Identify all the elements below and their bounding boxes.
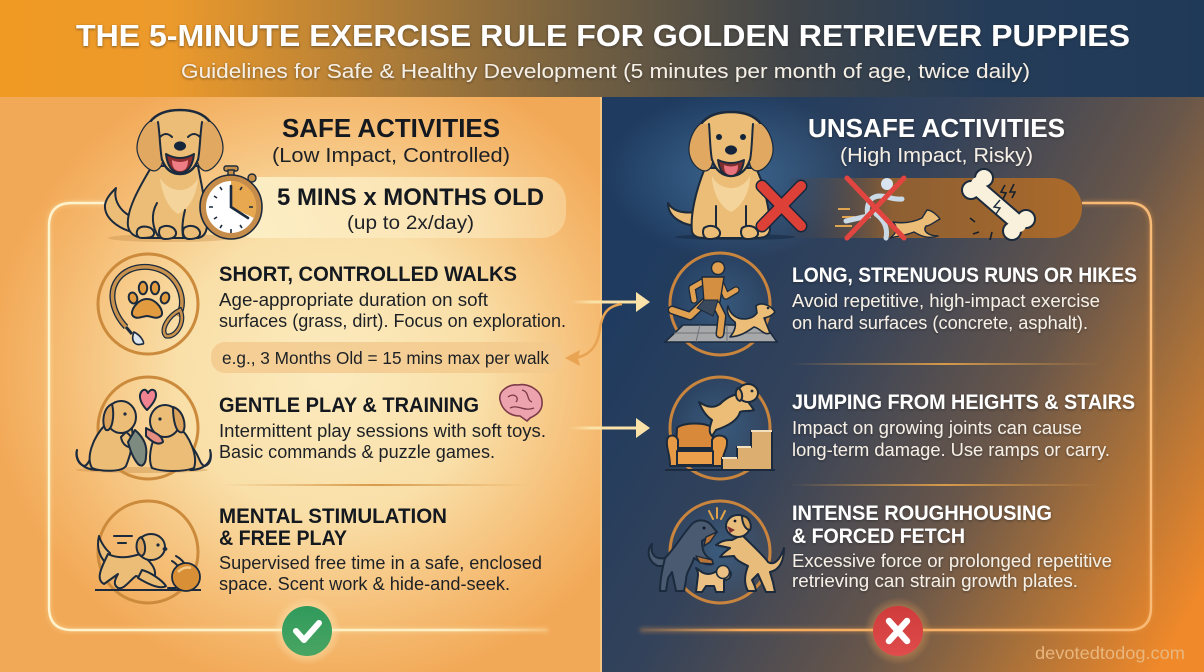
body: roughhousing xyxy=(792,551,1112,591)
item: jumping xyxy=(665,377,1135,479)
body: long runs: on hard surfaces (concrete, asphalt). xyxy=(792,313,1088,333)
icon: runner with dog on pavement xyxy=(665,253,777,355)
heading: short walks: SHORT, CONTROLLED WALKS xyxy=(219,263,517,286)
body: short walks xyxy=(219,290,566,331)
icon: red cross xyxy=(762,186,801,226)
icon: green check badge xyxy=(273,597,341,665)
watermark: devotedtodog.com xyxy=(1035,643,1185,663)
item: roughhousing xyxy=(649,501,1112,603)
subheading: low impact: (Low Impact, Controlled) xyxy=(272,145,510,167)
body: long runs: Avoid repetitive, high-impact exercise xyxy=(792,291,1100,311)
body: jumping xyxy=(792,418,1110,460)
icon: alert puppy xyxy=(668,112,795,240)
frame: safe panel outline xyxy=(49,203,548,630)
panel: safe activities xyxy=(0,97,601,672)
heading: roughhousing: INTENSE ROUGHHOUSING xyxy=(792,502,1052,525)
icon: red cross badge xyxy=(864,597,932,665)
arrow: walks to runs xyxy=(570,292,650,312)
header banner xyxy=(0,0,1204,97)
body: roughhousing: retrieving can strain growth plates. xyxy=(792,571,1078,591)
icon: brain xyxy=(500,385,542,421)
heading: safe activities: SAFE ACTIVITIES xyxy=(282,113,500,143)
body: gentle play: Basic commands & puzzle games. xyxy=(219,442,495,462)
subtitle: Guidelines for Safe & Healthy Development (5 minutes per month of age, twice daily) xyxy=(181,61,1030,83)
icon: happy puppy xyxy=(105,110,232,242)
heading: jumping: JUMPING FROM HEIGHTS & STAIRS xyxy=(792,391,1135,414)
formula pill xyxy=(230,113,566,238)
icon: crossed out running xyxy=(835,178,940,238)
heading: gentle play: GENTLE PLAY & TRAINING xyxy=(219,394,479,417)
body: mental stimulation: space. Scent work & hide-and-seek. xyxy=(219,574,510,594)
body: jumping: Impact on growing joints can cause xyxy=(792,418,1082,438)
item: long strenuous runs xyxy=(665,253,1137,355)
heading: mental stimulation xyxy=(219,505,447,550)
body: roughhousing: Excessive force or prolonged repetitive xyxy=(792,551,1112,571)
formula text: 5 MINS x MONTHS OLD xyxy=(277,184,544,211)
icon: dogs roughhousing xyxy=(649,501,784,603)
arrow: play to jumping xyxy=(568,418,650,438)
item: gentle play and training xyxy=(76,377,546,479)
heading: mental stimulation: MENTAL STIMULATION xyxy=(219,505,447,528)
icon: stopwatch xyxy=(200,166,262,239)
item: short controlled walks xyxy=(98,254,566,373)
icon: leash and paw xyxy=(98,254,198,354)
body: short walks: Age-appropriate duration on soft xyxy=(219,290,488,310)
body: gentle play xyxy=(219,421,546,462)
heading: roughhousing xyxy=(792,502,1052,548)
example pill xyxy=(211,342,563,373)
warning icons pill xyxy=(790,169,1082,240)
body: gentle play: Intermittent play sessions with soft toys. xyxy=(219,421,546,441)
heading: unsafe activities: UNSAFE ACTIVITIES xyxy=(808,113,1065,143)
body: mental stimulation: Supervised free time in a safe, enclosed xyxy=(219,553,542,573)
example pill: e.g., 3 Months Old = 15 mins max per walk xyxy=(222,348,549,368)
heading: roughhousing: & FORCED FETCH xyxy=(792,525,965,548)
frame: unsafe panel outline xyxy=(640,203,1151,630)
panel: unsafe activities xyxy=(602,90,1204,672)
body: jumping: long-term damage. Use ramps or carry. xyxy=(792,440,1110,460)
heading: mental stimulation: & FREE PLAY xyxy=(219,527,347,550)
body: short walks: surfaces (grass, dirt). Focus on exploration. xyxy=(219,311,566,331)
subheading: high impact: (High Impact, Risky) xyxy=(840,145,1033,167)
arrow: curved back to example xyxy=(565,304,622,366)
formula note: (up to 2x/day) xyxy=(347,213,474,234)
icon: two puppies playing xyxy=(76,377,211,479)
body: mental stimulation xyxy=(219,553,542,594)
title: THE 5-MINUTE EXERCISE RULE FOR GOLDEN RETRIEVER PUPPIES xyxy=(76,18,1130,53)
icon: puppy chasing ball xyxy=(95,501,201,603)
heading: long runs: LONG, STRENUOUS RUNS OR HIKES xyxy=(792,264,1137,287)
body: long runs xyxy=(792,291,1100,333)
item: mental stimulation xyxy=(95,501,542,603)
icon: broken bone xyxy=(962,169,1035,240)
icon: puppy jumping off couch to stairs xyxy=(665,377,775,479)
